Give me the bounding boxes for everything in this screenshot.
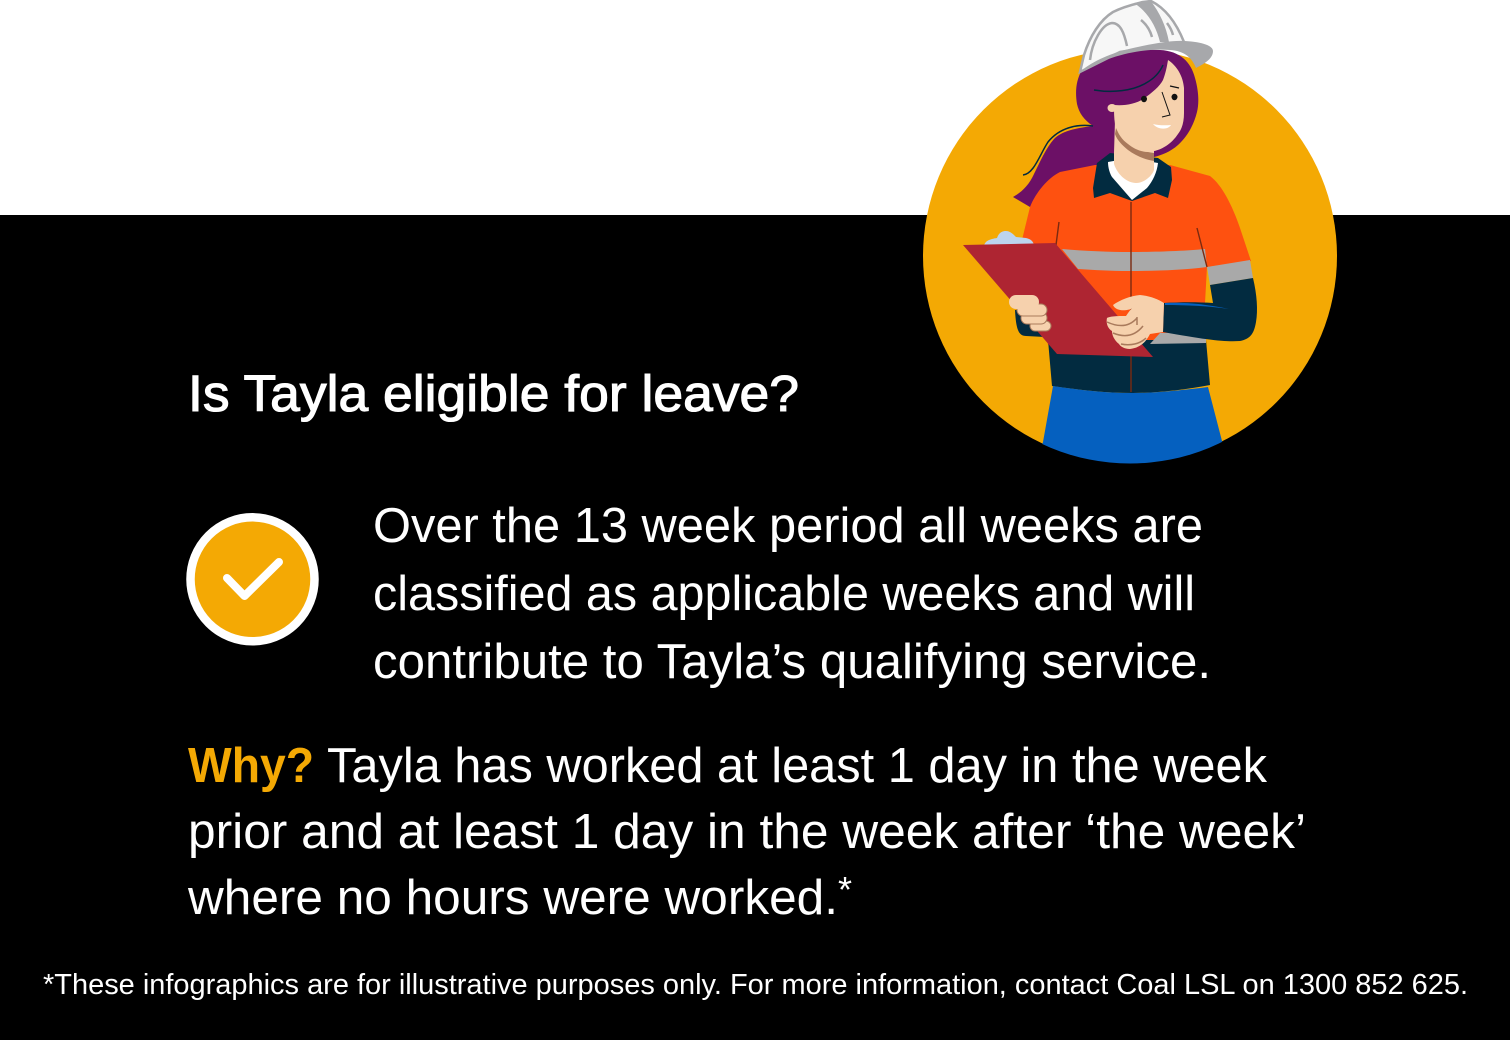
hair and ponytail bbox=[1013, 50, 1198, 207]
left hand fingers bbox=[1009, 295, 1051, 331]
neck bbox=[1114, 120, 1154, 183]
yellow circle bbox=[923, 49, 1337, 463]
illustration: Tayla, a worker with clipboard in a yellow circle bbox=[923, 0, 1337, 480]
text block: why explanation: Why? bbox=[188, 739, 314, 793]
clipboard clip bbox=[984, 231, 1034, 247]
face bbox=[1114, 60, 1184, 152]
hair fringe line bbox=[1094, 65, 1163, 91]
blue trousers bbox=[1042, 386, 1222, 464]
text block: outcome: contribute to Tayla’s qualifying service. bbox=[373, 635, 1211, 689]
grey reflective stripe bbox=[1062, 249, 1207, 271]
eyes, brow, nose and smile bbox=[1141, 86, 1179, 129]
text block: why explanation: Tayla has worked at least 1 day in the week bbox=[327, 739, 1267, 793]
text block: why explanation bbox=[187, 739, 1306, 925]
title: Is Tayla eligible for leave? bbox=[188, 365, 799, 422]
text block: outcome: classified as applicable weeks and will bbox=[373, 567, 1195, 621]
text block: why explanation: where no hours were worked. bbox=[187, 871, 838, 925]
text block: outcome bbox=[373, 499, 1211, 689]
white undershirt bbox=[1108, 158, 1158, 200]
shirt torso bbox=[1022, 165, 1251, 345]
icon: check mark badge bbox=[190, 517, 314, 641]
sleeve stripe bbox=[1207, 260, 1253, 285]
ear bbox=[1108, 104, 1116, 112]
text block: why explanation: prior and at least 1 day in the week after ‘the week’ bbox=[188, 805, 1306, 859]
blue cuff highlight bbox=[1165, 303, 1229, 309]
clipboard bbox=[963, 243, 1153, 357]
hard hat brim bbox=[1079, 41, 1213, 73]
text block: outcome: Over the 13 week period all weeks are bbox=[373, 499, 1203, 553]
right hand bbox=[1107, 295, 1164, 349]
lower grey stripe bbox=[1150, 332, 1206, 344]
ponytail strand bbox=[1023, 125, 1093, 175]
neck shadow bbox=[1115, 128, 1154, 161]
right hand finger lines bbox=[1107, 317, 1146, 345]
navy collar bbox=[1093, 153, 1172, 201]
footnote: *These infographics are for illustrative purposes only. For more information, contact Coal LSL on 1300 852 625. bbox=[43, 969, 1468, 1001]
left navy cuff bbox=[1015, 310, 1045, 337]
hard hat dome bbox=[1080, 1, 1184, 72]
hard hat ridge and vents bbox=[1134, 0, 1169, 42]
shirt seams bbox=[1056, 202, 1207, 392]
navy forearm bbox=[1163, 278, 1257, 341]
lower navy jacket bbox=[1048, 340, 1210, 393]
text block: why explanation: * bbox=[838, 869, 852, 910]
